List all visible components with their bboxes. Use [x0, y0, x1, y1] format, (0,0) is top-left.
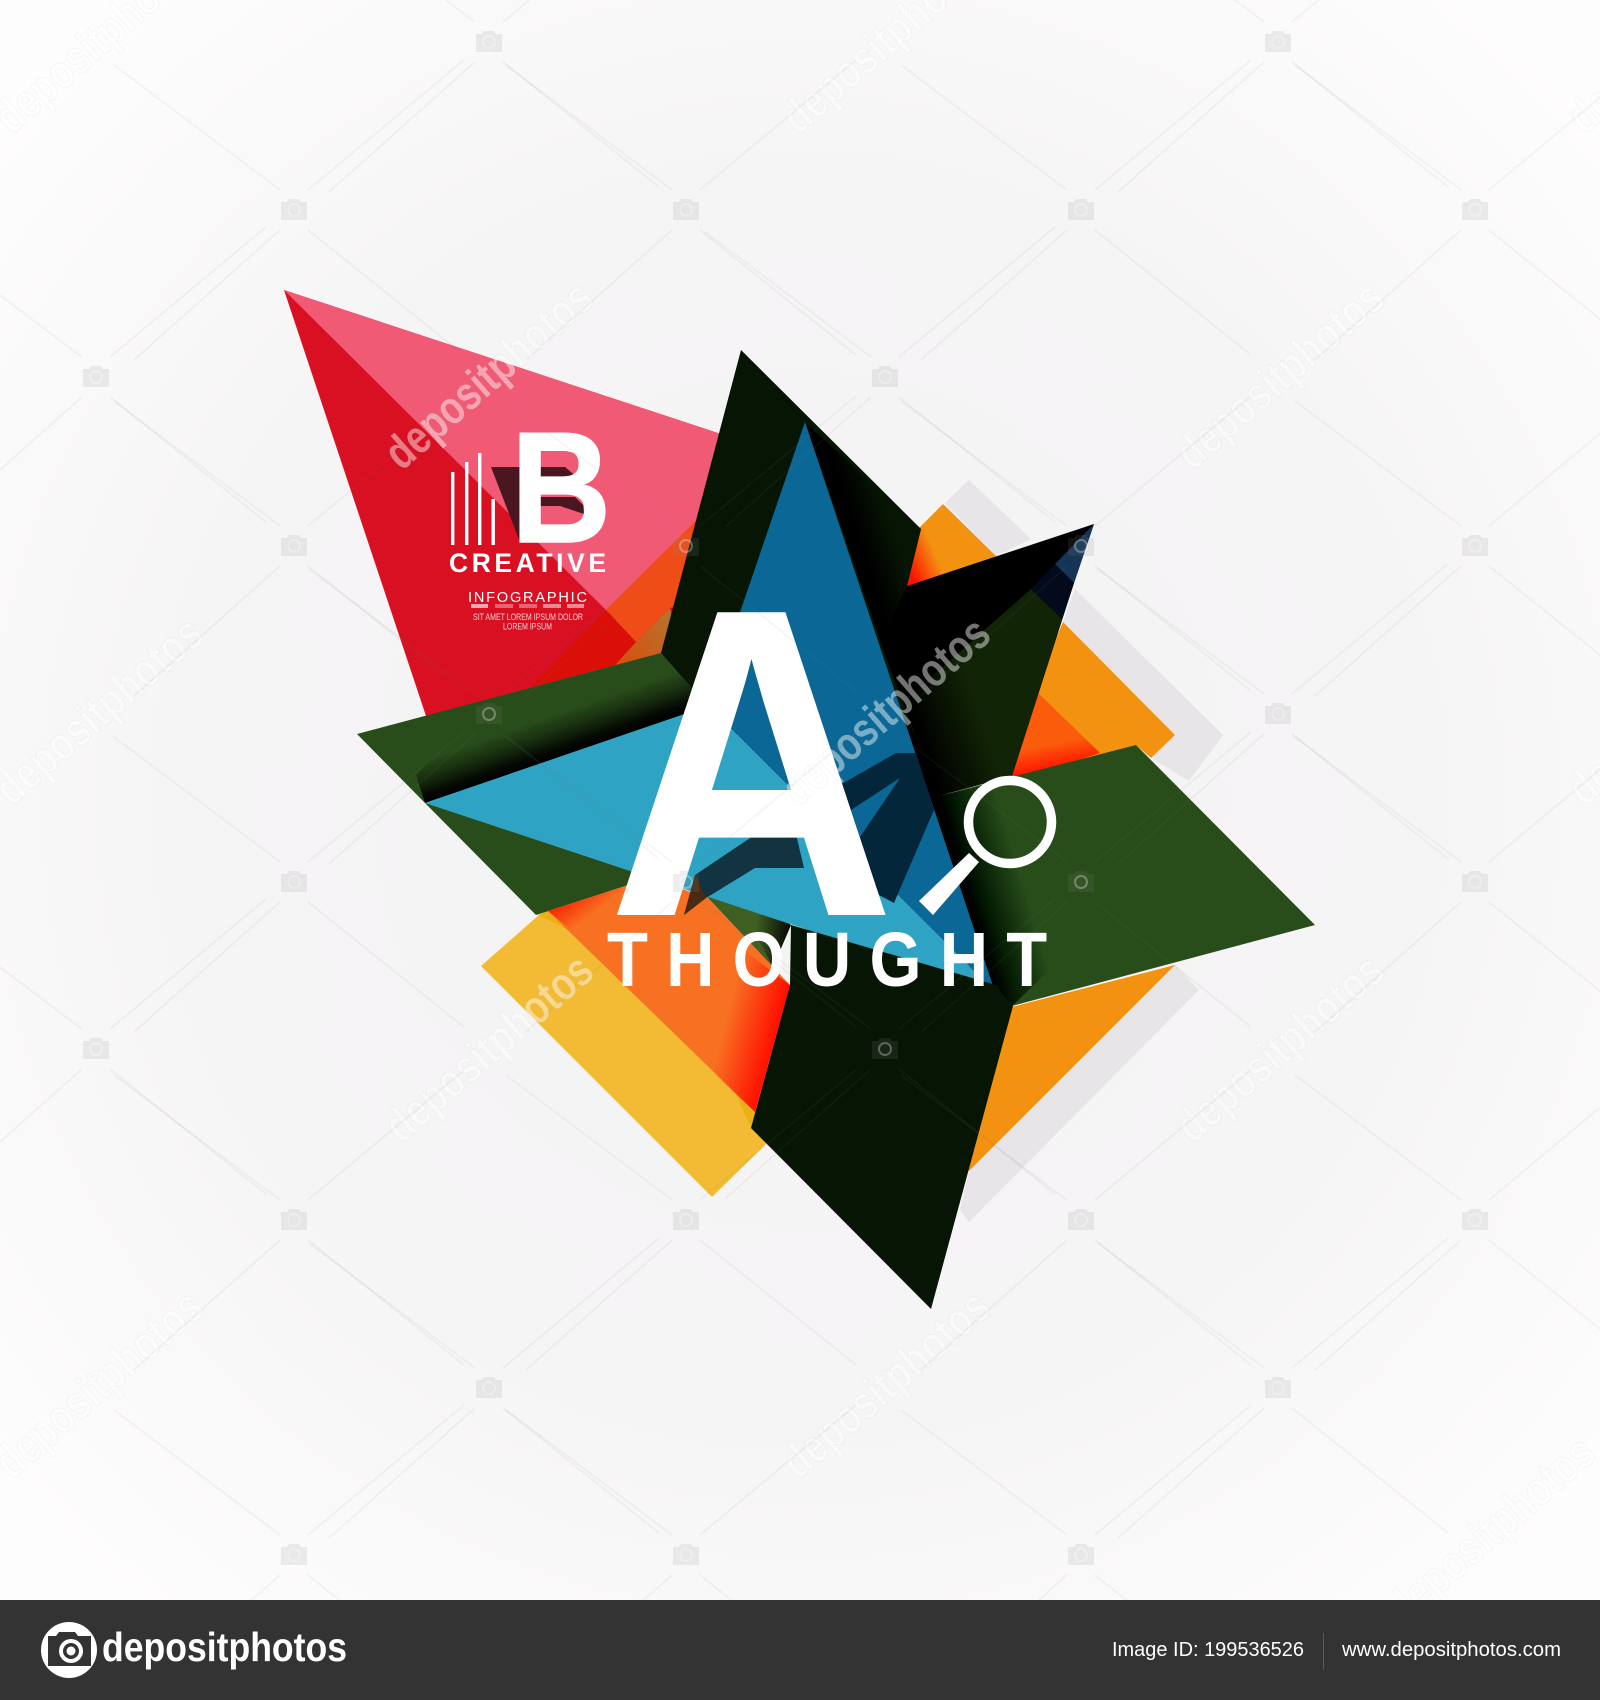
panel: light blue triangle: [425, 706, 995, 992]
icon: B shadow: [491, 467, 584, 542]
heading: CREATIVE: CREATIVE: [449, 548, 606, 578]
watermark text: depositphotos: [373, 270, 603, 479]
footer divider: [1323, 1633, 1324, 1670]
heading: letter A: A: [607, 518, 896, 1009]
panel: upper green band: [357, 653, 708, 803]
watermark text: depositphotos: [770, 1279, 1000, 1488]
grey paper shadows: [945, 480, 1223, 1222]
icon: magnifying glass: [919, 780, 1052, 915]
watermark text: depositphotos: [1164, 270, 1394, 479]
panel: lower green triangle: [425, 803, 791, 967]
icon: vertical bars logo: [451, 453, 495, 545]
icon: footer camera logo: [41, 1622, 97, 1678]
panel: pink and red triangle: [284, 290, 740, 716]
text: lorem lines: LOREM IPSUM: [503, 622, 552, 632]
watermark text: depositphotos: [770, 606, 1000, 815]
text: small bars: [471, 604, 584, 608]
text: INFOGRAPHIC: INFOGRAPHIC: [468, 590, 587, 606]
watermark text: depositphotos: [373, 943, 603, 1152]
panel: dark spike and wedge: [661, 350, 1094, 995]
footer website: www.depositphotos.com: [1341, 1639, 1561, 1661]
panel: bottom dark shape: [751, 925, 1013, 1309]
heading: letter B: B: [511, 399, 611, 576]
watermark text: depositphotos: [1164, 943, 1394, 1152]
panel: blue spike: [708, 422, 995, 992]
footer brand name: depositphotos: [102, 1624, 347, 1670]
heading: THOUGHT: THOUGHT: [607, 918, 1047, 1003]
panel: big green shape: [938, 745, 1315, 1006]
shadow of letter A: [684, 753, 934, 915]
footer bar: [0, 1600, 1600, 1700]
text: lorem lines: [473, 612, 583, 632]
rear orange and yellow paper strips: [481, 504, 1175, 1197]
text: lorem lines: SIT AMET LOREM IPSUM DOLOR: [473, 612, 583, 622]
panel: orange strip: [548, 878, 790, 1112]
footer image id: Image ID: 199536526: [1112, 1639, 1304, 1661]
